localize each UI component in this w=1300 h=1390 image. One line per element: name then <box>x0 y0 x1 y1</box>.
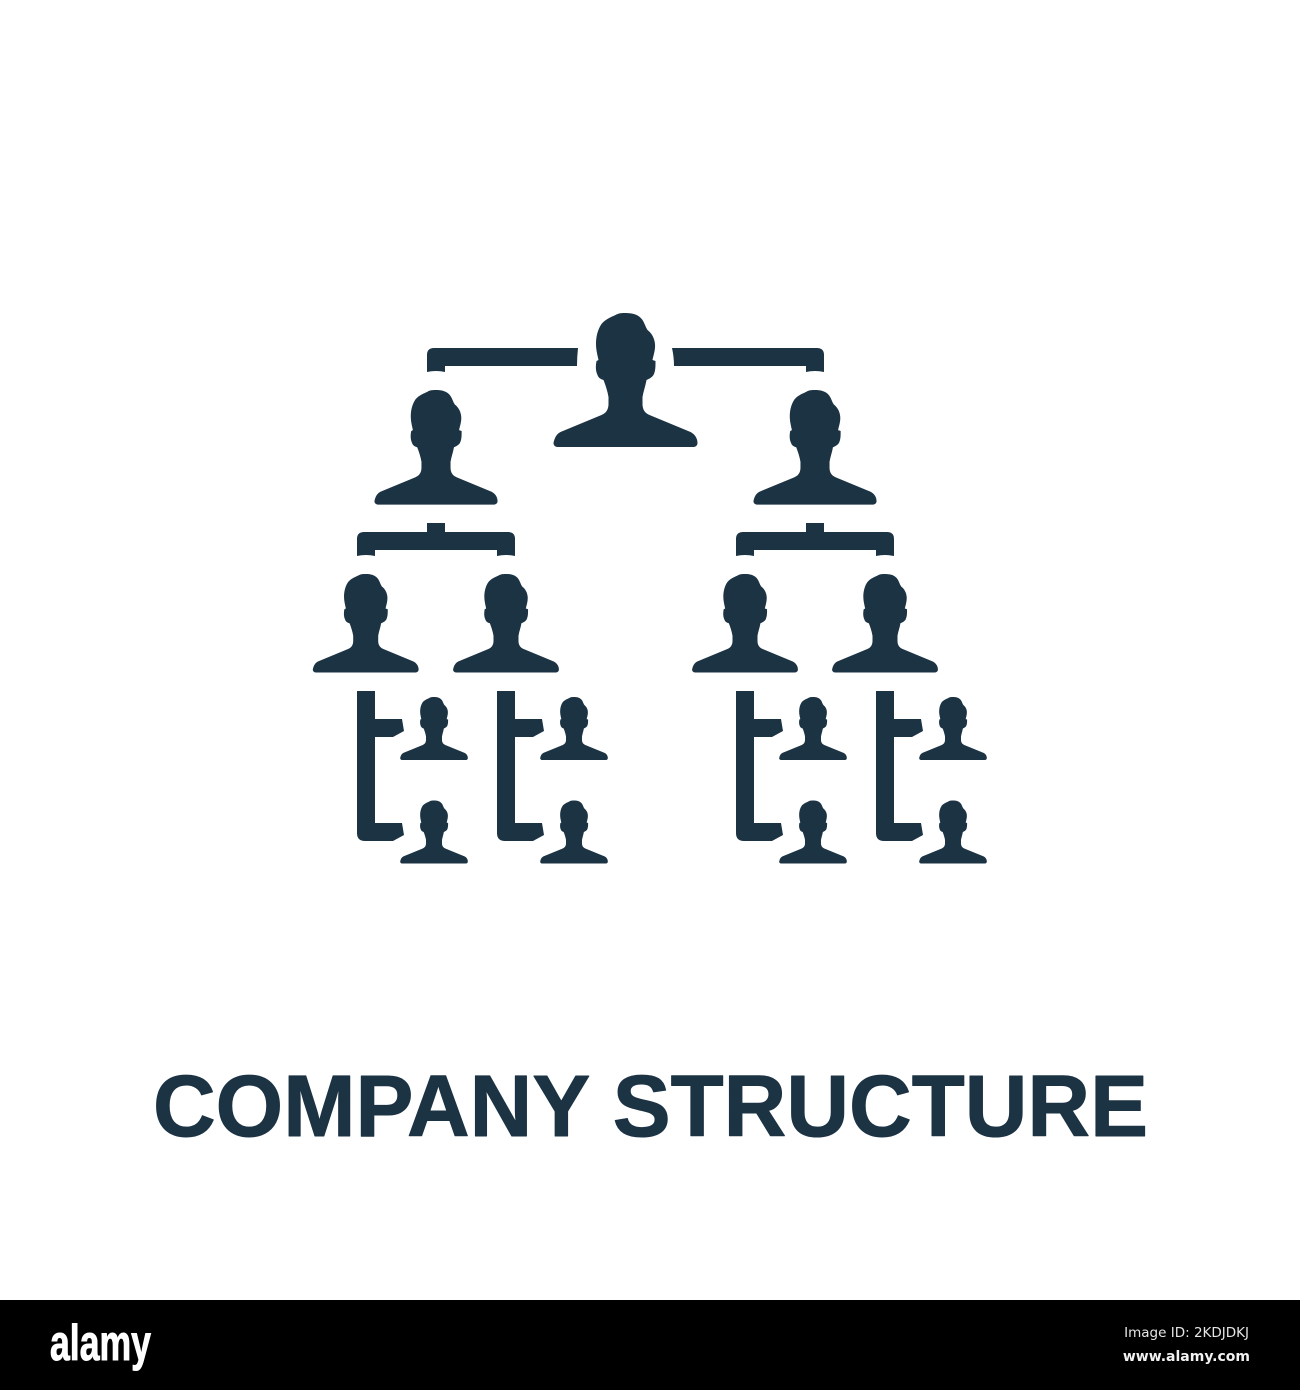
footer logo: alamy <box>50 1315 151 1371</box>
website: www.alamy.com <box>1123 1349 1250 1365</box>
connector: right bracket <box>736 523 894 556</box>
connector: top right <box>672 348 824 372</box>
connector: tree 4 <box>876 691 923 841</box>
person: team lead 2 <box>453 574 559 672</box>
connector: top left <box>427 348 578 372</box>
person: team lead 3 <box>692 574 798 672</box>
staff row 1 <box>400 697 987 760</box>
person: top executive <box>554 313 698 447</box>
person: right manager <box>753 390 877 505</box>
title: COMPANY STRUCTURE <box>153 1058 1148 1155</box>
image id: Image ID: 2KDJDKJ <box>1124 1325 1249 1341</box>
staff row 2 <box>400 800 987 863</box>
org chart icon <box>313 313 987 863</box>
connector: tree 2 <box>497 691 544 841</box>
connector: tree 3 <box>736 691 783 841</box>
footer band <box>0 1300 1300 1390</box>
connector: left bracket <box>357 523 515 556</box>
person: team lead 1 <box>313 574 419 672</box>
connector: tree 1 <box>357 691 404 841</box>
person: team lead 4 <box>832 574 938 672</box>
person: left manager <box>374 390 498 505</box>
